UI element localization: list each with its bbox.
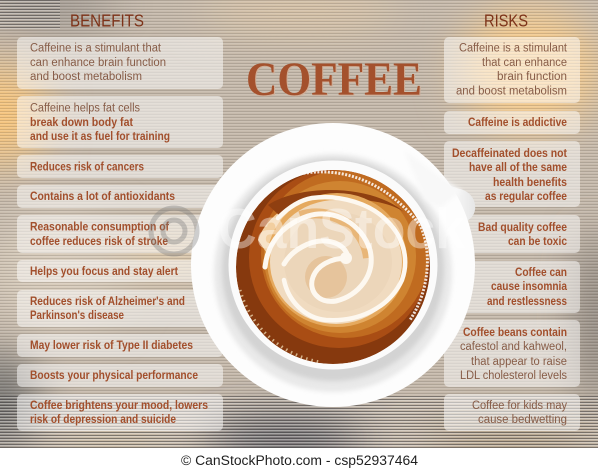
panel: benefits list xyxy=(17,37,223,431)
benefit: focus: Helps you focus and stay alert xyxy=(30,266,178,278)
risk: bad quality: Bad quality coffee xyxy=(478,222,567,234)
risk: cholesterol: LDL cholesterol levels xyxy=(460,370,567,382)
benefit: Alzheimer's: Reduces risk of Alzheimer's and xyxy=(30,296,185,308)
benefit: cancers: Reduces risk of cancers xyxy=(30,162,144,174)
benefit: physical performance: Boosts your physical performance xyxy=(30,370,198,382)
benefit: antioxidants: Contains a lot of antioxidants xyxy=(30,191,175,203)
risk: decaffeinated: have all of the same xyxy=(469,162,567,174)
risk: stimulant: and boost metabolism xyxy=(456,86,567,98)
risk: cholesterol: cafestol and kahweol, xyxy=(460,341,567,353)
panel: risks list xyxy=(444,37,580,431)
risk: bedwetting: cause bedwetting xyxy=(478,414,567,426)
crema bubbles xyxy=(240,290,320,362)
risk: stimulant: brain function xyxy=(497,71,567,83)
risk: insomnia: cause insomnia xyxy=(491,281,568,293)
benefit: fat cells: and use it as fuel for training xyxy=(30,131,170,143)
saucer xyxy=(191,123,475,407)
risk: bedwetting: Coffee for kids may xyxy=(472,400,567,412)
benefit: fat cells: Caffeine helps fat cells xyxy=(30,102,140,114)
risk: decaffeinated: health benefits xyxy=(493,177,567,189)
risk: insomnia: and restlessness xyxy=(487,296,567,308)
risk: decaffeinated: as regular coffee xyxy=(485,191,567,203)
risk: stimulant xyxy=(444,37,580,103)
benefit: mood xyxy=(17,394,223,431)
risk: insomnia: Coffee can xyxy=(515,267,567,279)
benefit: stroke xyxy=(17,215,223,253)
risk: stimulant: that can enhance xyxy=(482,57,567,69)
benefit: stimulant: and boost metabolism xyxy=(30,71,142,83)
cup handle xyxy=(410,165,475,223)
benefit: stimulant xyxy=(17,37,223,89)
benefit: stroke: Reasonable consumption of xyxy=(30,222,169,234)
watermark: CanStock logo: CanStock xyxy=(218,197,465,261)
illustration: coffee cup on saucer xyxy=(191,123,475,407)
heading: risks: RISKS xyxy=(484,10,528,30)
milk swirl strokes xyxy=(265,197,405,320)
risk: cholesterol: that appear to raise xyxy=(471,356,567,368)
risk: bad quality: can be toxic xyxy=(508,236,568,248)
title: COFFEE: COFFEE xyxy=(246,53,422,106)
benefit: diabetes xyxy=(17,334,223,357)
benefit: Alzheimer's: Parkinson's disease xyxy=(30,310,124,322)
risk: decaffeinated xyxy=(444,141,580,207)
benefit: mood: risk of depression and suicide xyxy=(30,414,176,426)
title: COFFEE: COFFEE xyxy=(247,54,423,107)
benefit: stimulant: can enhance brain function xyxy=(30,57,166,69)
footer credit: © CanStockPhoto.com - csp52937464 xyxy=(181,453,418,468)
risk: decaffeinated: Decaffeinated does not xyxy=(452,148,567,160)
risk: addictive: Caffeine is addictive xyxy=(468,117,567,129)
benefit: fat cells: break down body fat xyxy=(30,117,133,129)
benefit: stimulant: Caffeine is a stimulant that xyxy=(30,42,162,54)
risk: insomnia xyxy=(444,261,580,313)
benefit: Alzheimer's xyxy=(17,290,223,327)
risk: bedwetting xyxy=(444,394,580,431)
cup rim xyxy=(228,160,438,370)
risk: bad quality xyxy=(444,215,580,253)
benefit: cancers xyxy=(17,155,223,178)
heading: benefits: BENEFITS xyxy=(70,10,144,30)
benefit: mood: Coffee brightens your mood, lowers xyxy=(30,400,208,412)
risk: stimulant: Caffeine is a stimulant xyxy=(459,42,568,54)
benefit: focus xyxy=(17,260,223,282)
risk: cholesterol: Coffee beans contain xyxy=(463,327,567,339)
coffee surface xyxy=(236,168,430,364)
benefit: physical performance xyxy=(17,364,223,387)
benefit: fat cells xyxy=(17,96,223,148)
benefit: stroke: coffee reduces risk of stroke xyxy=(30,236,168,248)
benefit: antioxidants xyxy=(17,185,223,208)
benefit: diabetes: May lower risk of Type II diabetes xyxy=(30,340,193,352)
risk: addictive xyxy=(444,111,580,134)
risk: cholesterol xyxy=(444,320,580,387)
